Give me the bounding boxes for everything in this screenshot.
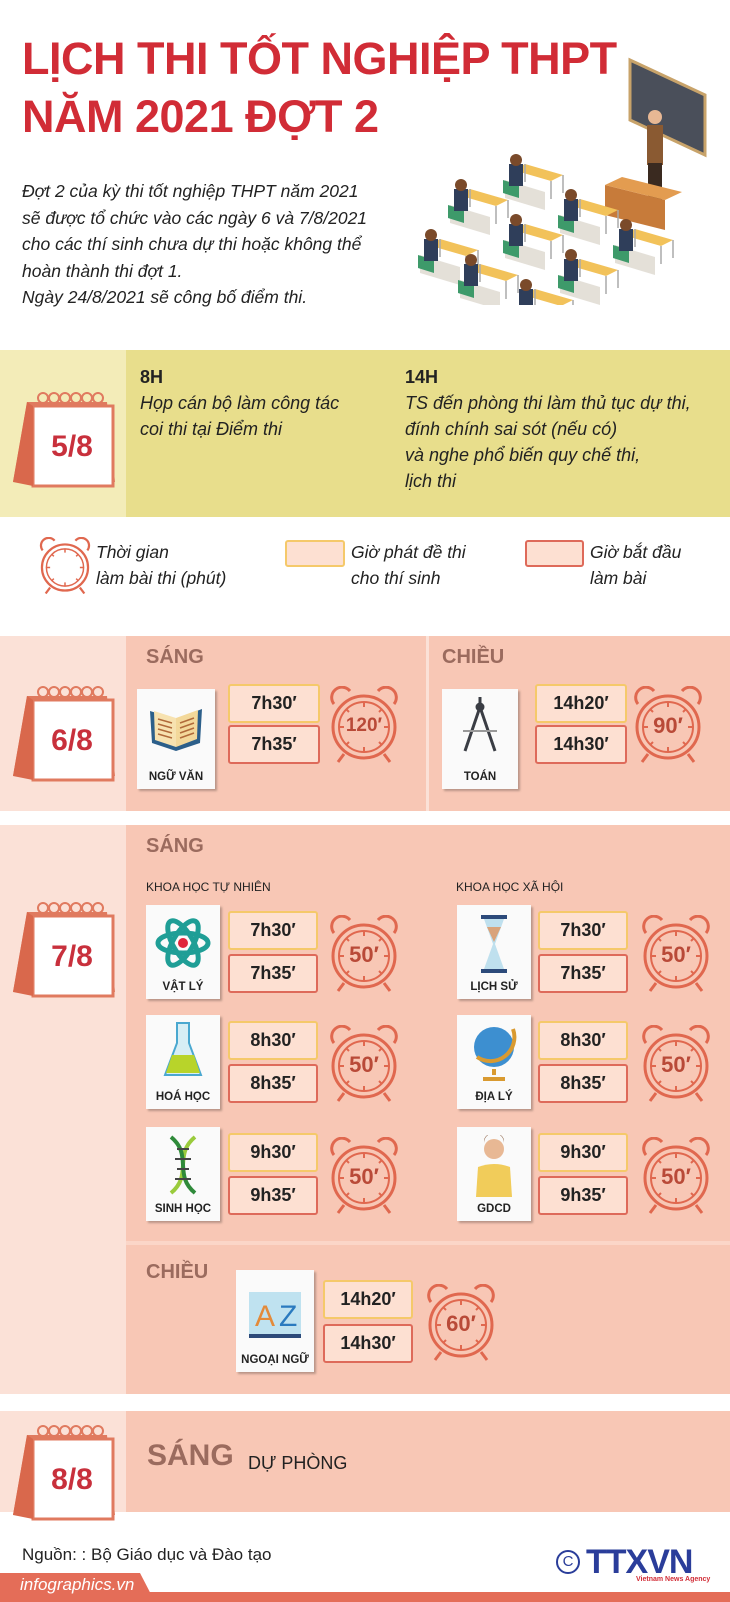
row: lịch sử (457, 905, 710, 1002)
intro text (22, 181, 367, 307)
text: 8H (140, 367, 339, 439)
row: ngoại ngữ: 60′ (446, 1311, 476, 1336)
panel: 8/8 (0, 1411, 730, 1512)
icon: calendar 5/8 (13, 392, 115, 488)
footer: source: Nguồn: : Bộ Giáo dục và Đào tạo (22, 1545, 272, 1564)
icon: calendar 5/8: 5/8 (51, 430, 93, 463)
icon: calendar 6/8 (13, 686, 115, 782)
title (22, 33, 617, 142)
text: 14H: đính chính sai sót (nếu có) (405, 419, 617, 439)
row: vật lý: 7h35′ (250, 963, 296, 983)
row: sinh học: 9h35′ (250, 1185, 296, 1205)
row: vật lý (146, 905, 398, 1002)
title: NĂM 2021 ĐỢT 2 (22, 91, 378, 142)
row: gdcd (457, 1127, 710, 1224)
legend: red box (525, 540, 584, 567)
legend: Giờ phát đề thi (351, 542, 466, 562)
legend: Thời gian (96, 542, 169, 562)
row: sinh học: 50′ (349, 1164, 379, 1189)
logo: TTXVN: C (563, 1553, 573, 1570)
row: sinh học (146, 1127, 398, 1224)
legend: cho thí sinh (351, 568, 440, 588)
row: hoá học (146, 1015, 398, 1112)
panel: 6/8: 14h20′ (553, 693, 609, 713)
icon: calendar 7/8: 7/8 (51, 940, 93, 973)
row: vật lý: VẬT LÝ (163, 981, 203, 993)
icon: calendar 8/8: 8/8 (51, 1463, 93, 1496)
legend: làm bài (590, 568, 646, 588)
row: địa lý: ĐỊA LÝ (475, 1091, 513, 1103)
heading: sáng dự phòng: SÁNG (147, 1439, 234, 1472)
legend: Giờ bắt đầu (590, 542, 681, 562)
panel: 6/8: 14h30′ (553, 734, 609, 754)
row: gdcd: 9h30′ (560, 1142, 606, 1162)
row: ngoại ngữ: 14h20′ (340, 1289, 396, 1309)
row: hoá học: HOÁ HỌC (156, 1091, 210, 1103)
intro text: cho các thí sinh chưa dự thi hoặc không thể (22, 234, 361, 254)
row: vật lý: 7h30′ (250, 920, 296, 940)
row: ngoại ngữ: 14h30′ (340, 1333, 396, 1353)
clock: 90: 90′ (653, 713, 683, 738)
row: lịch sử: 7h30′ (560, 920, 606, 940)
text: 14H (405, 367, 691, 491)
row: ngoại ngữ (236, 1270, 495, 1375)
row: hoá học: 8h35′ (250, 1073, 296, 1093)
row: gdcd: 9h35′ (560, 1185, 606, 1205)
row: hoá học: 50′ (349, 1052, 379, 1077)
illustration: classroom (418, 58, 706, 305)
clock: 90 (634, 686, 702, 763)
label: khoa học tự nhiên: KHOA HỌC TỰ NHIÊN (146, 880, 271, 894)
logo: TTXVN: TTXVN (586, 1543, 692, 1581)
card: toán (442, 689, 518, 789)
panel: 6/8 (0, 636, 730, 811)
footer bar: infographics.vn (20, 1575, 134, 1594)
text: 14H: và nghe phổ biến quy chế thi, (405, 445, 640, 465)
logo: TTXVN (556, 1543, 710, 1583)
row: gdcd: GDCD (477, 1203, 511, 1215)
text: 14H: lịch thi (405, 471, 456, 491)
row: địa lý: 50′ (661, 1052, 691, 1077)
card: ngữ văn (137, 689, 215, 789)
panel: 6/8: 7h35′ (251, 734, 297, 754)
row: địa lý (457, 1015, 710, 1112)
intro text: sẽ được tổ chức vào các ngày 6 và 7/8/2021 (22, 208, 367, 228)
label: khoa học xã hội: KHOA HỌC XÃ HỘI (456, 880, 563, 894)
text: 14H: 14H (405, 367, 438, 387)
clock: 120 (330, 686, 398, 763)
row: hoá học: 8h30′ (250, 1030, 296, 1050)
icon: calendar 6/8: 6/8 (51, 724, 93, 757)
legend (40, 537, 681, 594)
row: lịch sử: 7h35′ (560, 963, 606, 983)
heading: sáng: SÁNG (146, 835, 204, 857)
row: ngoại ngữ: A (255, 1300, 275, 1333)
intro text: Ngày 24/8/2021 sẽ công bố điểm thi. (22, 287, 307, 307)
row: địa lý: 8h30′ (560, 1030, 606, 1050)
legend: clock (40, 537, 90, 594)
row: sinh học: 9h30′ (250, 1142, 296, 1162)
row: sinh học: SINH HỌC (155, 1203, 211, 1215)
card: toán: TOÁN (464, 771, 496, 783)
row: lịch sử: LỊCH SỬ (470, 981, 518, 993)
text: 8H: coi thi tại Điểm thi (140, 419, 282, 439)
text: 8H: Họp cán bộ làm công tác (140, 393, 339, 413)
footer bar (0, 1573, 730, 1602)
text: 14H: TS đến phòng thi làm thủ tục dự thi, (405, 393, 691, 413)
panel: 6/8: 7h30′ (251, 693, 297, 713)
row: lịch sử: 50′ (661, 942, 691, 967)
legend: yellow box (285, 540, 345, 567)
row: ngoại ngữ: Z (279, 1300, 297, 1333)
panel: 5/8 (0, 350, 730, 517)
card: ngữ văn: NGỮ VĂN (149, 771, 203, 783)
panel: 8/8: DỰ PHÒNG (248, 1453, 347, 1473)
heading: sáng: SÁNG (146, 646, 204, 668)
logo: TTXVN: Vietnam News Agency (636, 1576, 710, 1583)
row: địa lý: 8h35′ (560, 1073, 606, 1093)
intro text: hoàn thành thi đợt 1. (22, 260, 182, 280)
intro text: Đợt 2 của kỳ thi tốt nghiệp THPT năm 2021 (22, 181, 358, 201)
clock: 120: 120′ (346, 715, 382, 736)
row: gdcd: 50′ (661, 1164, 691, 1189)
heading: chiều: CHIỀU (442, 646, 504, 668)
icon: calendar 8/8 (13, 1425, 115, 1520)
legend: làm bài thi (phút) (96, 568, 226, 588)
text: 8H: 8H (140, 367, 163, 387)
title: LỊCH THI TỐT NGHIỆP THPT (22, 33, 617, 84)
panel: 7/8 (0, 825, 730, 1394)
row: ngoại ngữ: NGOẠI NGỮ (241, 1354, 309, 1366)
heading: chiều: CHIỀU (146, 1261, 208, 1283)
icon: calendar 7/8 (13, 902, 115, 998)
row: vật lý: 50′ (349, 942, 379, 967)
